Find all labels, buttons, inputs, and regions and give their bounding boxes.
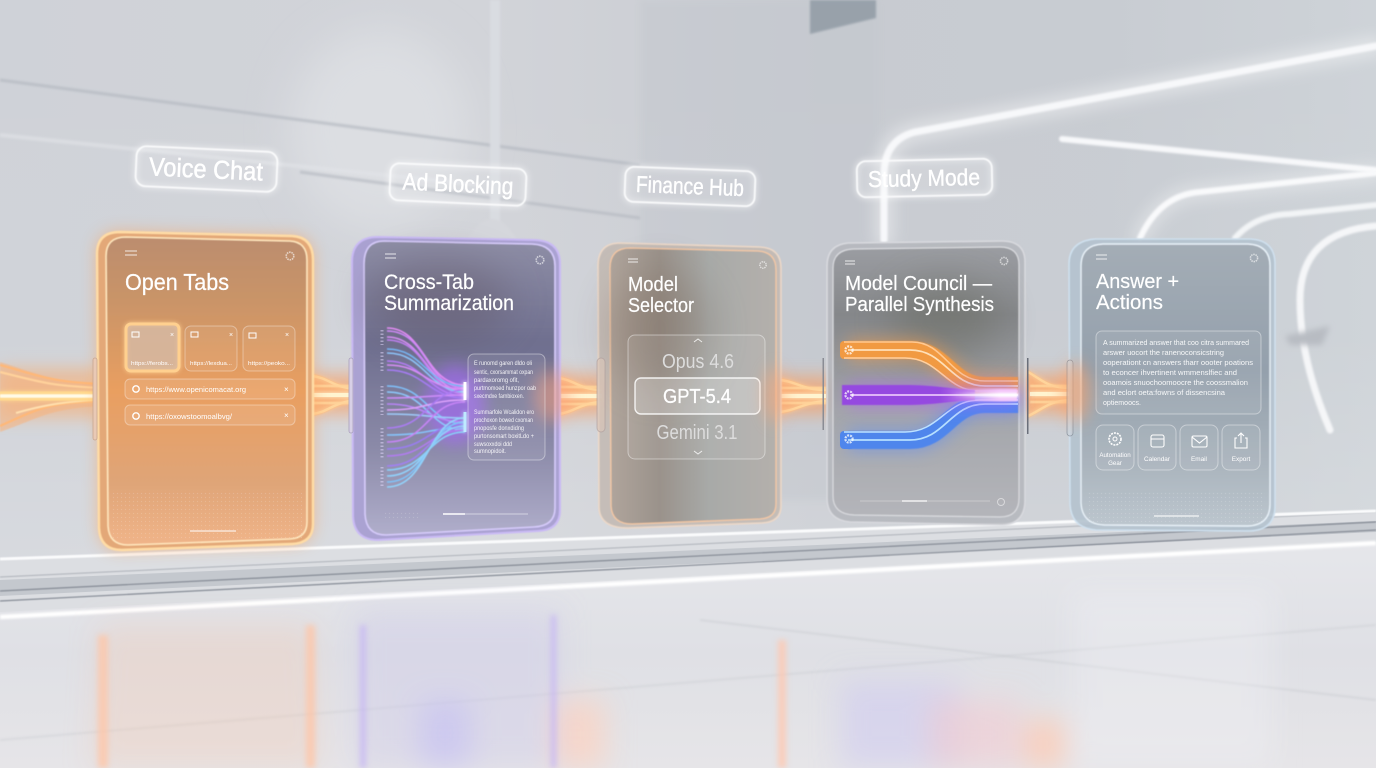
heading: Model Council - Parallel Synthesis: Parallel Synthesis <box>845 293 994 316</box>
floor <box>0 511 1376 768</box>
model list: Gemini 3.1 <box>656 422 738 444</box>
ribbon: orange <box>840 341 1018 391</box>
url row 2: https://oxowstoomoalbvg/ <box>146 412 233 421</box>
text card: summary: sumnopidoit. <box>474 449 506 455</box>
ribbon: purple <box>842 385 1018 405</box>
answer text card <box>1096 331 1261 414</box>
text card: summary: sxecmdxe farnbioxen. <box>474 394 524 400</box>
url row 2 <box>125 405 295 425</box>
action: Email <box>1180 425 1218 470</box>
heading: Cross-Tab Summarization: Cross-Tab <box>384 271 474 294</box>
icons: model nodes <box>845 346 853 443</box>
answer text card: optiemoocs. <box>1103 398 1141 407</box>
text card: summary: prochoxon bowed cxoman <box>474 418 533 424</box>
tab card: third: × <box>285 332 289 339</box>
icon: settings gear <box>760 262 766 268</box>
panel: Answer + Actions <box>1062 239 1275 531</box>
text card: summary: purtmomoed hunzpor oab <box>474 386 537 392</box>
url row 2: × <box>284 411 289 420</box>
tab card: second: https://lexdua... <box>190 361 233 367</box>
flow connector: panel 1 to 2 <box>306 374 362 416</box>
text card: summary: sentic, cxorsammat oxpan <box>474 370 533 376</box>
text card: summary <box>468 354 570 460</box>
background room wall <box>0 0 1376 570</box>
model list <box>628 335 765 459</box>
tab card: active: https://ferobs... <box>131 361 174 367</box>
flow connector: stream into panel 1 <box>0 362 104 432</box>
label: Voice Chat: Voice Chat <box>148 151 264 187</box>
answer text card: and eclort oeta:fowns of dissencsina <box>1103 388 1226 397</box>
tab card: active: × <box>170 332 174 339</box>
answer text card: arswer uocort the ranenoconsicstring <box>1103 348 1224 357</box>
action: Export: Export <box>1232 456 1250 463</box>
label: Study Mode <box>857 159 992 197</box>
icon: settings gear <box>1250 254 1258 262</box>
fiber diagram <box>382 328 485 487</box>
label: Ad Blocking <box>389 163 527 206</box>
icon: settings gear <box>286 252 294 260</box>
text card: summary: suwsoxxdoi ddd <box>474 442 512 448</box>
heading: Model Selector: Selector <box>628 295 694 317</box>
action: Export <box>1222 425 1260 470</box>
icon: settings gear <box>536 256 544 264</box>
flow connector: panel 2 to 3 <box>550 376 608 416</box>
panel: Open Tabs <box>93 232 313 550</box>
tab card: third <box>243 326 295 371</box>
text card: summary: pardaxoromg ofit, <box>474 378 519 384</box>
selected model: GPT-5.4 <box>663 386 731 408</box>
url row 1 <box>125 379 295 399</box>
heading: Answer + Actions: Actions <box>1096 291 1163 314</box>
text card: summary: purtonsomart boxitLdo + <box>474 434 534 440</box>
url row 1: × <box>284 385 289 394</box>
heading: Model Council - Parallel Synthesis: Model Council — <box>845 272 992 295</box>
flow connector: panel 3 to 4 <box>772 378 834 414</box>
panel: Model Selector <box>597 243 785 528</box>
label: Ad Blocking: Ad Blocking <box>402 168 514 201</box>
heading: Answer + Actions: Answer + <box>1096 270 1179 293</box>
action: Calendar: Calendar <box>1144 456 1171 463</box>
icon: settings gear <box>1000 257 1008 265</box>
flow connector: panel 4 to 5 <box>1018 370 1082 418</box>
answer text card: to econcer ihvertinent wmmenslfiec and <box>1103 368 1237 377</box>
label: Voice Chat <box>135 146 278 192</box>
ribbon: blue <box>840 400 1018 449</box>
action: Automation Gear: Gear <box>1108 460 1122 467</box>
action: Automation Gear <box>1096 425 1134 470</box>
text card: summary: E runomd garen dldo oli <box>474 361 532 367</box>
heading: Cross-Tab Summarization: Summarization <box>384 292 514 315</box>
answer text card: A summarized answer that coo citra summared <box>1103 338 1249 347</box>
answer text card: ooamois snuochoomoocre the coossmalion <box>1103 378 1248 387</box>
action: Email: Email <box>1191 456 1207 463</box>
action: Calendar <box>1138 425 1176 470</box>
heading: Open Tabs: Open Tabs <box>125 269 229 295</box>
panel: Model Council - Parallel Synthesis <box>822 241 1028 525</box>
action: Automation Gear: Automation <box>1099 452 1131 459</box>
tab card: second: × <box>229 332 233 339</box>
label: Study Mode: Study Mode <box>868 164 980 192</box>
label: Finance Hub <box>624 167 756 206</box>
text card: summary: pnoposfe donxdidng <box>474 426 524 432</box>
heading: Model Selector: Model <box>628 274 678 296</box>
tab card: active <box>126 324 179 371</box>
text card: summary: Summarfole Wcalidon ero <box>474 410 535 416</box>
label: Finance Hub: Finance Hub <box>636 171 744 201</box>
floor reflections <box>92 590 1272 768</box>
ceiling light strips <box>884 46 1376 430</box>
tab card: second <box>185 326 237 371</box>
url row 1: https://www.openicomacat.org <box>146 385 246 394</box>
panel: Cross-Tab Summarization <box>349 237 570 540</box>
tab card: third: https://peoko... <box>248 361 291 367</box>
answer text card: ooperationt cn answers tharr oooter poations <box>1103 358 1253 367</box>
model list: Opus 4.6 <box>662 351 734 373</box>
